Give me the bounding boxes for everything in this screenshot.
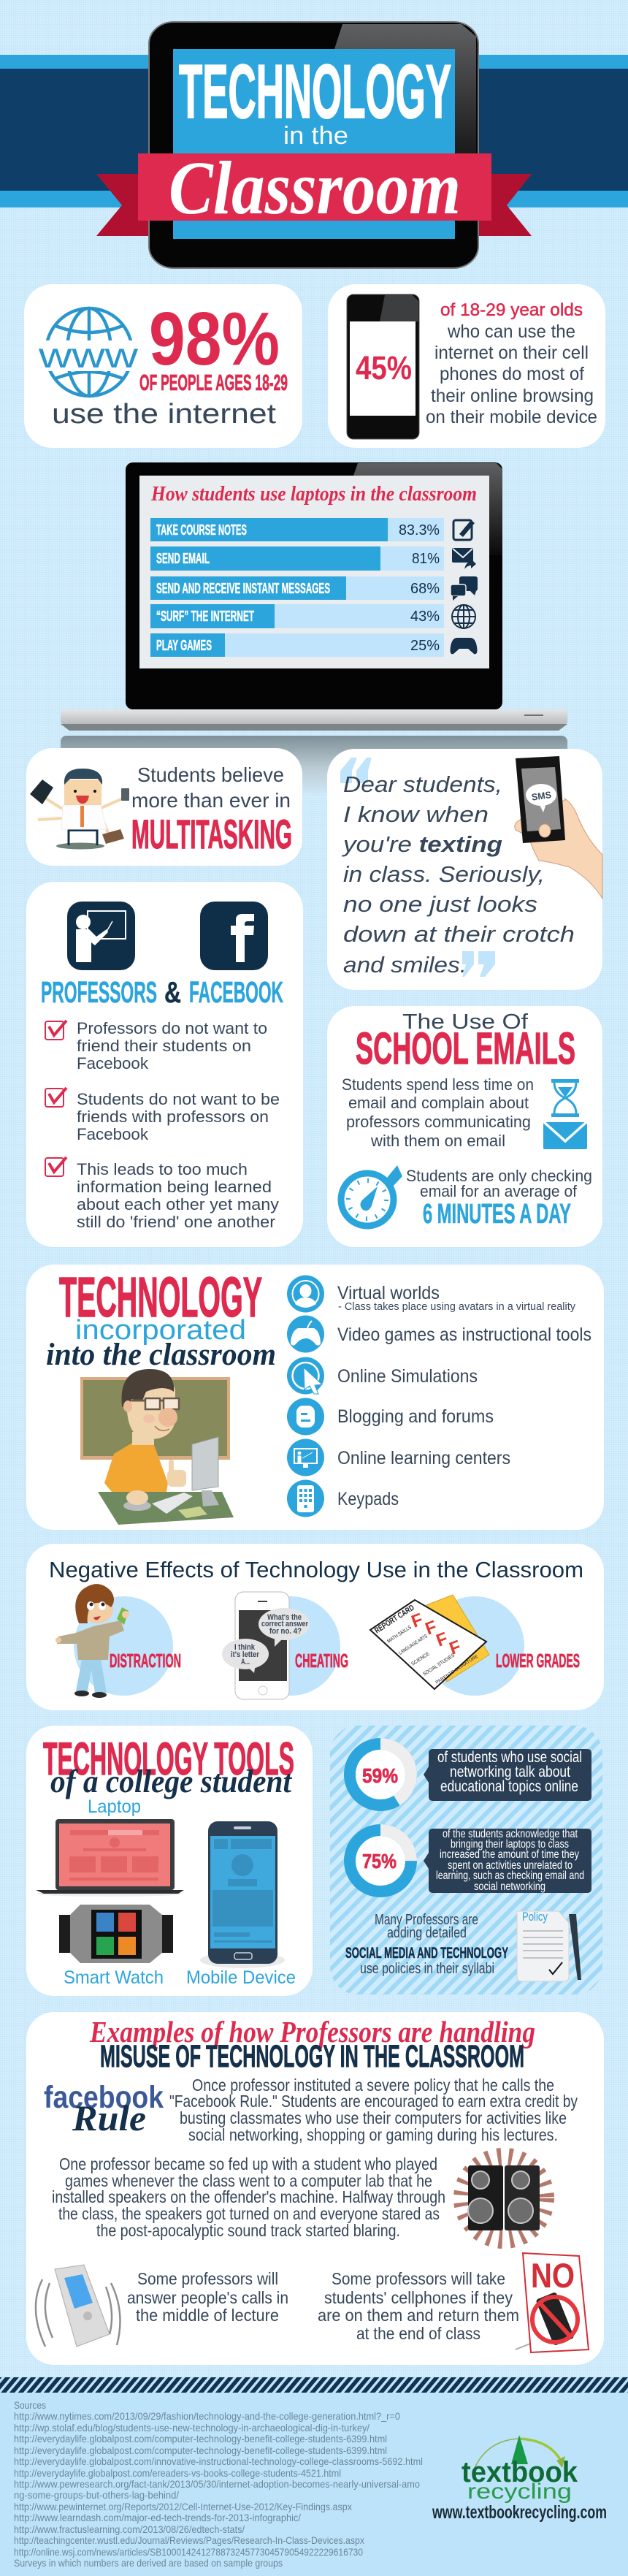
effect: cheating: CHEATING	[295, 1650, 348, 1672]
icon: ringing cell phone	[36, 2265, 120, 2347]
bar: instant messages: SEND AND RECEIVE INSTANT MESSAGES	[156, 581, 330, 597]
bar: surf the internet: 43%	[410, 609, 440, 625]
callout: 59 percent: educational topics online	[440, 1778, 578, 1795]
checklist item 3: information being learned	[77, 1178, 272, 1196]
callout: 75 percent: increased the amount of time they	[440, 1848, 579, 1861]
panel: technology tools: Smart Watch	[64, 1967, 164, 1988]
bar: take course notes: 83.3%	[399, 522, 440, 538]
illustration: report card: SCIENCE	[410, 1651, 431, 1667]
panel: school emails	[327, 1006, 602, 1247]
checklist item 3	[45, 1157, 279, 1231]
quote text: down at their crotch	[343, 921, 575, 947]
icon: opening quote mark	[340, 758, 372, 783]
effect: distraction: DISTRACTION	[110, 1650, 181, 1672]
checklist item 3: about each other yet many	[77, 1195, 279, 1213]
heading: misuse of technology	[89, 2015, 535, 2074]
paragraph: speakers: the post-apocalyptic sound track started blaring.	[96, 2221, 400, 2240]
paragraph: facebook rule: busting classmates who use their computers for activities like	[180, 2108, 567, 2127]
quote text: and smiles.	[343, 952, 467, 978]
checklist item 1: friend their students on	[77, 1037, 251, 1055]
heading: technology tools: TECHNOLOGY TOOLS	[43, 1734, 294, 1785]
list item: online learning centers	[287, 1439, 510, 1476]
paragraph: facebook rule	[169, 2076, 578, 2144]
panel: technology tools: Mobile Device	[186, 1967, 296, 1988]
panel: multitasking: MULTITASKING	[131, 811, 292, 857]
illustration: report card: LANGUAGE ARTS	[398, 1634, 429, 1656]
callout: 75 percent: learning, such as checking email and	[436, 1870, 584, 1882]
icon: facebook	[200, 902, 268, 970]
list item: virtual worlds	[287, 1276, 575, 1313]
panel: 45 percent mobile: internet on their cell	[434, 343, 589, 363]
icon: smartphone	[347, 294, 419, 439]
list item: virtual worlds: Virtual worlds	[337, 1283, 440, 1303]
illustration: distracted boy	[55, 1584, 129, 1698]
panel: 45 percent mobile: 45%	[356, 349, 412, 386]
footer background	[0, 2393, 628, 2576]
checklist item 3: still do 'friend' one another	[77, 1213, 275, 1231]
panel: 45 percent mobile: who can use the	[447, 321, 575, 342]
icon: stopwatch	[341, 1165, 402, 1226]
header: tablet with title: in the	[283, 122, 348, 150]
callout: 75 percent: bringing their laptops to class	[451, 1838, 569, 1851]
policy text	[345, 1912, 508, 1977]
paragraph: speakers: the class, the speakers got turned on and everyone stared as	[58, 2204, 440, 2223]
icon: speakers	[463, 2157, 545, 2239]
heading: professors and facebook: FACEBOOK	[189, 975, 283, 1009]
paragraph: answer calls	[127, 2269, 288, 2325]
sources list: http://everydaylife.globalpost.com/computer-technology-benefit-college-students-6399.html	[14, 2444, 387, 2456]
panel: 45 percent mobile: their online browsing	[431, 386, 594, 406]
checklist item 1	[45, 1019, 267, 1072]
sources list: http://www.pewinternet.org/Reports/2012/Cell-Internet-Use-2012/Key-Findings.aspx	[14, 2501, 352, 2512]
quote text	[342, 771, 575, 978]
list item: online simulations: Online Simulations	[337, 1366, 478, 1387]
hatched divider	[0, 2377, 628, 2393]
icon: envelope arrow	[452, 548, 476, 569]
checklist item 2: friends with professors on	[77, 1108, 269, 1126]
policy text: Many Professors are	[375, 1912, 478, 1928]
heading: technology incorporated: incorporated	[75, 1315, 246, 1346]
header: tablet with title: Classroom	[169, 146, 461, 230]
panel: social networking stats	[330, 1726, 602, 1994]
panel: quote about texting	[327, 749, 602, 990]
quote text: in class. Seriously,	[343, 861, 545, 887]
bar: surf the internet: “SURF” THE INTERNET	[156, 609, 254, 625]
panel: 45 percent mobile	[328, 284, 605, 448]
illustration: mobile phone	[200, 1821, 285, 1968]
panel: 45 percent mobile: of 18-29 year olds	[440, 300, 583, 320]
icon: teacher at board	[67, 902, 135, 970]
paragraph: take cellphones	[318, 2269, 519, 2343]
bar: send email: SEND EMAIL	[156, 551, 210, 567]
paragraph: take cellphones: students' cellphones if they	[324, 2288, 513, 2307]
heading: misuse of technology: Examples of how Professors are handling	[89, 2015, 535, 2049]
heading: professors and facebook: PROFESSORS	[41, 975, 157, 1009]
list item: blogging and forums	[287, 1398, 494, 1435]
paragraph: answer calls: answer people's calls in	[127, 2288, 288, 2307]
illustration: phone with chat: it's letter	[231, 1650, 260, 1659]
illustration: man at computer	[80, 1369, 234, 1525]
heading: technology incorporated: into the classroom	[46, 1338, 276, 1372]
illustration: report card	[370, 1595, 489, 1689]
illustration: report card: MATH SKILLS	[386, 1625, 413, 1645]
checklist item 1: Facebook	[77, 1054, 149, 1072]
donut chart: 75 percent: 75%	[362, 1850, 397, 1872]
panel: multitasking: Students believe	[137, 763, 284, 786]
bar: surf the internet	[150, 604, 444, 628]
icon: closing quote mark	[462, 951, 495, 977]
panel: 98 percent internet: 98%	[149, 297, 280, 381]
panel: multitasking	[26, 748, 302, 866]
list item: video games: Video games as instructional tools	[337, 1325, 591, 1345]
bar: play games: 25%	[410, 638, 440, 654]
panel: school emails: Students are only checking	[406, 1167, 592, 1185]
sources list: http://www.pewresearch.org/fact-tank/2013/05/30/internet-adoption-becomes-nearly-universal-amo	[14, 2478, 420, 2490]
effect: distraction	[55, 1584, 181, 1698]
icon: policy document and pen	[517, 1910, 581, 1981]
illustration: report card: REPORT CARD	[373, 1604, 416, 1636]
bar: play games: PLAY GAMES	[156, 638, 212, 654]
callout: 59 percent	[424, 1749, 591, 1801]
heading: technology tools: of a college student	[50, 1764, 293, 1799]
panel: multitasking: more than ever in	[131, 789, 291, 812]
policy text: use policies in their syllabi	[360, 1961, 494, 1977]
email paragraph: professors communicating	[346, 1113, 531, 1131]
bar: take course notes	[150, 518, 444, 541]
callout: 75 percent: social networking	[474, 1880, 545, 1893]
paragraph: speakers: games whenever the class went to a computer lab that he	[65, 2171, 432, 2190]
paragraph: facebook rule: Once professor instituted a severe policy that he calls the	[192, 2076, 554, 2095]
illustration: report card: F	[434, 1628, 451, 1651]
quote text: you're texting	[342, 831, 502, 857]
panel: 98 percent internet: www	[38, 337, 138, 376]
callout: 75 percent: spent on activities unrelated to	[448, 1859, 573, 1872]
panel: school emails: email for an average of	[420, 1182, 578, 1200]
donut chart: 59 percent	[350, 1744, 411, 1805]
illustration: laptop	[36, 1819, 184, 1897]
illustration: hand holding phone	[515, 756, 602, 899]
checklist item 2: Facebook	[77, 1125, 149, 1143]
illustration: report card: SOCIAL STUDIES	[422, 1653, 456, 1677]
checklist item 2: Students do not want to be	[77, 1090, 280, 1108]
laptop reflection	[61, 736, 567, 798]
list item: video games	[287, 1315, 591, 1353]
logo: textbook recycling: textbook	[462, 2456, 578, 2488]
checklist item 3: This leads to too much	[77, 1160, 248, 1178]
illustration: phone with chat: correct answer	[261, 1620, 309, 1628]
checklist item 1: Professors do not want to	[77, 1019, 267, 1037]
email paragraph	[342, 1075, 534, 1150]
illustration: report card: F	[423, 1617, 440, 1639]
list item: virtual worlds: - Class takes place using avatars in a virtual reality	[338, 1300, 575, 1313]
panel: 45 percent mobile: phones do most of	[440, 364, 584, 384]
donut chart: 59 percent: 59%	[362, 1764, 398, 1787]
panel: technology tools	[26, 1726, 313, 1996]
illustration: phone with chat: What's the	[267, 1613, 302, 1622]
paragraph: take cellphones: at the end of class	[356, 2324, 480, 2343]
effect: lower grades	[370, 1595, 580, 1696]
bar: send email	[150, 546, 444, 571]
panel: misuse of technology	[26, 2012, 604, 2365]
header: tablet with title	[96, 22, 532, 268]
callout: 59 percent: networking talk about	[450, 1764, 570, 1780]
illustration: phone with chat: A...	[241, 1658, 250, 1666]
panel: technology incorporated	[26, 1265, 604, 1530]
sources list: http://online.wsj.com/news/articles/SB10001424127887324577304579054922229616730	[14, 2546, 363, 2558]
icon: small globe	[452, 605, 475, 628]
bar: instant messages	[150, 576, 444, 600]
panel: 98 percent internet: use the internet	[52, 399, 277, 430]
sources list: http://www.fractuslearning.com/2013/08/26/edtech-stats/	[14, 2523, 245, 2535]
logo: facebook rule	[44, 2080, 164, 2138]
icon: www globe	[37, 308, 140, 396]
icon: envelope	[543, 1122, 587, 1149]
logo: facebook rule: Rule	[72, 2097, 146, 2138]
callout: 75 percent: of the students acknowledge that	[443, 1828, 578, 1840]
panel: technology tools: Laptop	[88, 1796, 141, 1817]
heading: technology incorporated	[46, 1266, 276, 1372]
logo: textbook recycling	[432, 2435, 607, 2523]
illustration: phone with chat: I think	[234, 1643, 256, 1652]
sources list: http://everydaylife.globalpost.com/ereaders-vs-books-college-students-4521.html	[14, 2467, 341, 2479]
laptop with bar chart	[126, 462, 502, 709]
quote text: no one just looks	[343, 891, 537, 917]
email paragraph: email and complain about	[348, 1094, 529, 1112]
heading: technology tools	[43, 1734, 294, 1799]
sources list: Surveys in which numbers are derived are based on sample groups	[14, 2557, 283, 2569]
panel: 45 percent mobile: on their mobile device	[426, 407, 597, 427]
paragraph: facebook rule: social networking, shopping or gaming during his lectures.	[188, 2125, 558, 2144]
illustration: report card: F	[409, 1609, 426, 1632]
paragraph: speakers	[52, 2154, 445, 2240]
chart title: How students use laptops in the classroom	[150, 482, 477, 506]
paragraph: speakers: One professor became so fed up with a student who played	[59, 2154, 437, 2173]
sources list: http://wp.stolaf.edu/blog/students-use-new-technology-in-archaeological-dig-in-turkey/	[14, 2422, 369, 2434]
policy text: adding detailed	[387, 1925, 467, 1941]
sources list: ng-some-groups-but-others-lag-behind/	[14, 2489, 179, 2501]
paragraph: speakers: installed speakers on the offender's machine. Halfway through	[52, 2187, 445, 2206]
icon: no phones sign: NO	[531, 2256, 575, 2295]
icon: hourglass	[551, 1079, 579, 1117]
illustration: report card: F	[447, 1636, 464, 1659]
panel: 98 percent internet: OF PEOPLE AGES 18-29	[139, 370, 288, 395]
panel: negative effects: Negative Effects of Technology Use in the Classroom	[49, 1557, 583, 1582]
list item: keypads	[287, 1480, 399, 1517]
list item: blogging and forums: Blogging and forums	[337, 1406, 494, 1427]
sources list: http://www.nytimes.com/2013/09/29/fashion/technology-and-the-college-generation.html?_r=0	[14, 2410, 400, 2422]
icon: gamepad	[450, 638, 478, 654]
paragraph: answer calls: the middle of lecture	[136, 2306, 279, 2325]
bar: play games	[150, 633, 444, 657]
sources list: Sources	[14, 2399, 46, 2411]
list item: keypads: Keypads	[337, 1489, 399, 1509]
callout: 59 percent: of students who use social	[437, 1749, 582, 1766]
bar: instant messages: 68%	[410, 581, 440, 597]
list item: online learning centers: Online learning centers	[337, 1448, 510, 1468]
quote text: Dear students,	[343, 771, 502, 797]
illustration: multitasking man	[30, 769, 129, 849]
heading: technology incorporated: TECHNOLOGY	[59, 1266, 262, 1329]
paragraph: take cellphones: are on them and return them	[318, 2306, 519, 2325]
email paragraph: Students spend less time on	[342, 1075, 534, 1094]
logo: facebook rule: facebook	[44, 2080, 164, 2115]
icon: policy document and pen: Policy	[522, 1910, 548, 1924]
laptop base	[61, 709, 567, 731]
illustration: report card: PARENTS SIGNATURE	[435, 1655, 479, 1685]
sources list: http://everydaylife.globalpost.com/innovative-instructional-technology-college-classrooms-5692.html	[14, 2455, 423, 2467]
sources list: http://teachingcenter.wustl.edu/Journal/Reviews/Pages/Research-In-Class-Devices.aspx	[14, 2534, 364, 2546]
bar: send email: 81%	[412, 551, 440, 567]
quote text: I know when	[343, 801, 489, 827]
callout: 75 percent	[424, 1828, 591, 1893]
list item: online simulations	[287, 1357, 478, 1394]
icon: chat bubbles	[451, 576, 478, 601]
logo: textbook recycling: recycling	[467, 2480, 572, 2504]
illustration: phone with chat: for no. 4?	[269, 1627, 302, 1636]
illustration: smart watch	[59, 1905, 173, 1963]
sources list	[14, 2399, 423, 2569]
panel: school emails: The Use Of	[402, 1010, 529, 1034]
heading: professors and facebook: &	[164, 975, 181, 1009]
illustration: hand holding phone: SMS	[531, 789, 552, 803]
panel: professors and facebook	[26, 882, 303, 1247]
panel: 98 percent internet	[24, 284, 302, 448]
sources list: http://www.learndash.com/major-ed-tech-trends-for-2013-infographic/	[14, 2512, 301, 2523]
effect: cheating	[222, 1592, 348, 1699]
checklist item 2	[45, 1088, 280, 1143]
sources list: http://everydaylife.globalpost.com/computer-technology-benefit-college-students-6399.html	[14, 2433, 387, 2444]
policy text: SOCIAL MEDIA AND TECHNOLOGY	[345, 1945, 508, 1962]
email paragraph: with them on email	[370, 1132, 505, 1150]
bar: take course notes: TAKE COURSE NOTES	[156, 522, 247, 538]
illustration: phone with chat	[222, 1592, 310, 1699]
panel: negative effects	[26, 1544, 604, 1710]
paragraph: take cellphones: Some professors will take	[332, 2269, 505, 2288]
icon: note pencil	[453, 520, 475, 540]
donut chart: 75 percent	[350, 1830, 411, 1891]
header band	[0, 55, 628, 207]
paragraph: answer calls: Some professors will	[137, 2269, 278, 2288]
icon: no phones sign	[516, 2253, 589, 2352]
